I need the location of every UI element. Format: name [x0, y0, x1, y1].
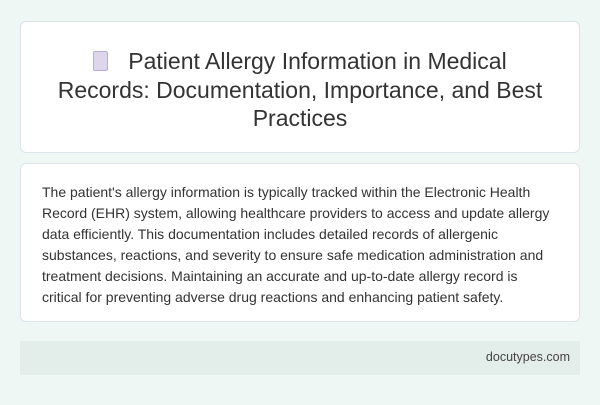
footer: [20, 341, 580, 375]
title: Patient Allergy Information in Medical: [128, 48, 507, 74]
title: Records: Documentation, Importance, and Best: [58, 76, 542, 102]
body card: [20, 163, 580, 322]
description text: The patient's allergy information is typically tracked within the Electronic Health: [42, 184, 530, 200]
title: [58, 48, 542, 131]
description text: [42, 184, 550, 305]
description text: critical for preventing adverse drug reactions and enhancing patient safety.: [42, 289, 503, 305]
description text: substances, reactions, and severity to ensure safe medication administration and: [42, 247, 543, 263]
description text: data efficiently. This documentation includes detailed records of allergenic: [42, 226, 498, 242]
header card: [20, 21, 580, 153]
title: Practices: [253, 105, 347, 131]
icon: document: [93, 51, 108, 71]
description text: Record (EHR) system, allowing healthcare providers to access and update allergy: [42, 205, 549, 221]
footer text: docutypes.com: [486, 350, 570, 364]
description text: treatment decisions. Maintaining an accurate and up-to-date allergy record is: [42, 268, 517, 284]
